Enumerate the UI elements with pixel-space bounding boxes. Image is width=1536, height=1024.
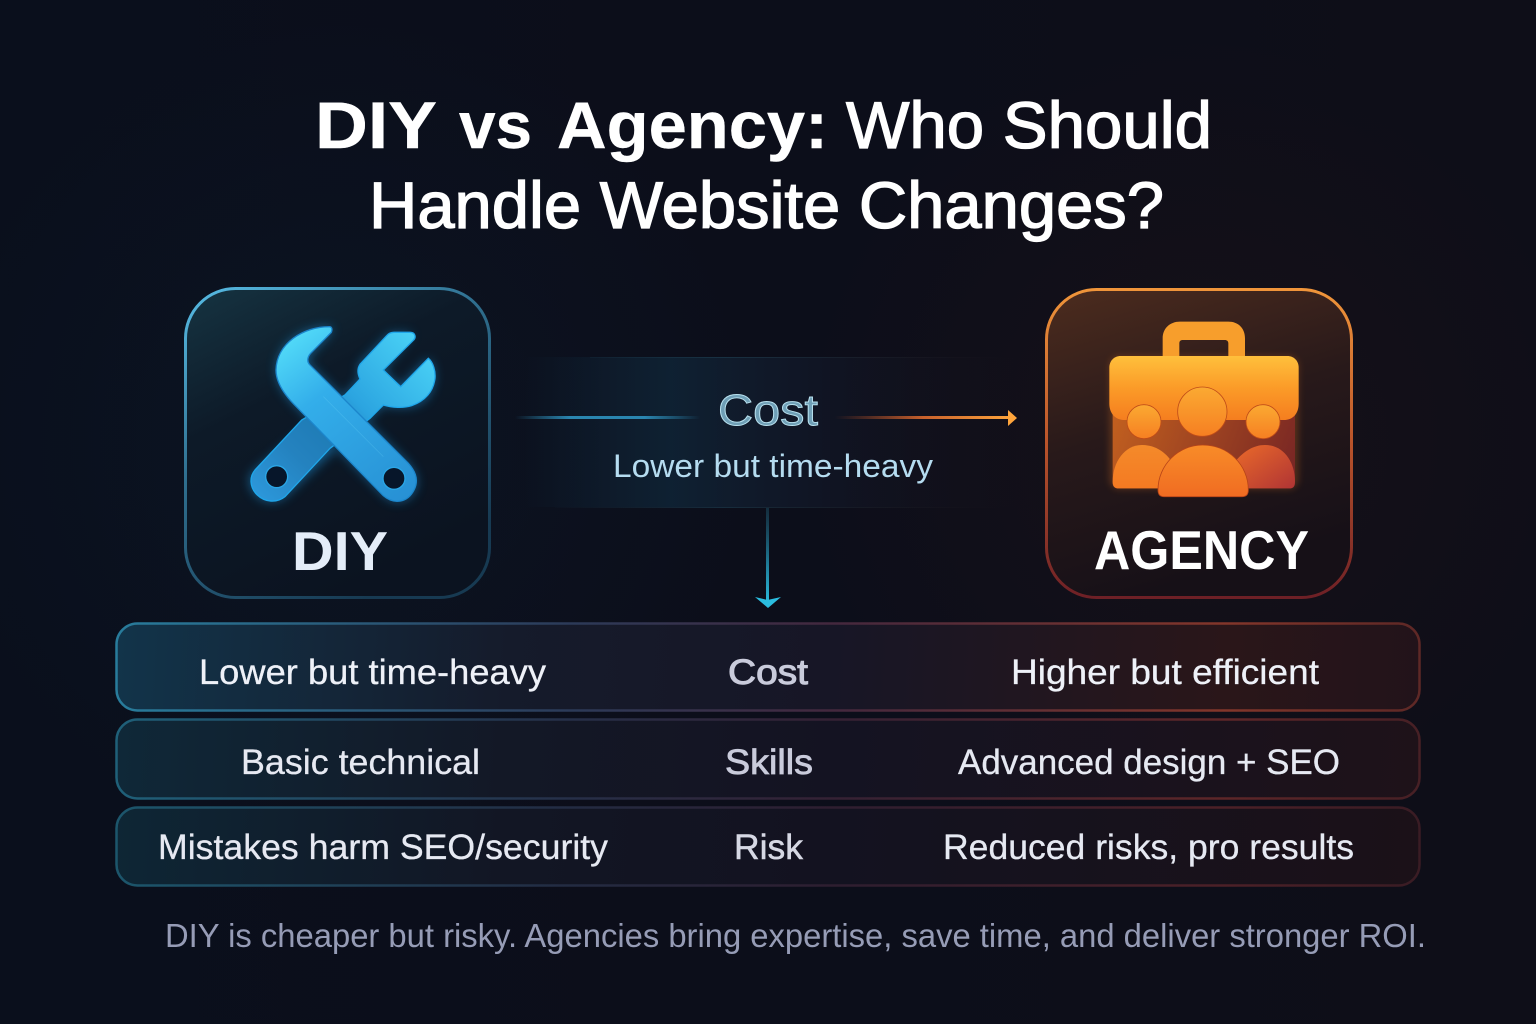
briefcase handle xyxy=(1163,322,1245,358)
comparison row: cost: Lower but time-heavy xyxy=(199,653,547,692)
comparison row: skills: Advanced design + SEO xyxy=(958,743,1340,782)
comparison row: skills: Basic technical xyxy=(241,743,480,782)
front wrench xyxy=(276,327,416,501)
icon: briefcase with team xyxy=(1109,322,1299,497)
title: Handle Website Changes? xyxy=(369,168,1164,242)
briefcase lid xyxy=(1109,356,1299,420)
cost heading: Cost xyxy=(718,386,818,435)
title: vs xyxy=(459,88,532,162)
DIY label: DIY xyxy=(292,520,388,582)
comparison row: risk xyxy=(116,808,1420,886)
agency label: AGENCY xyxy=(1094,519,1309,581)
arrow: down to table xyxy=(755,508,781,608)
panel: cost comparison center xyxy=(515,357,1017,508)
front wrench hole xyxy=(383,467,405,489)
panel: DIY xyxy=(186,288,490,598)
back wrench xyxy=(251,332,435,501)
cost description: Lower but time-heavy xyxy=(613,448,933,484)
comparison row: risk: Mistakes harm SEO/security xyxy=(158,828,609,867)
comparison row: cost: Cost xyxy=(728,653,808,692)
back wrench hole xyxy=(266,466,288,488)
title: Who Should xyxy=(846,88,1212,162)
title xyxy=(315,88,1212,242)
arrow: toward agency xyxy=(835,410,1017,426)
panel: agency xyxy=(1046,290,1352,598)
briefcase body xyxy=(1113,408,1295,488)
title: DIY xyxy=(315,88,437,162)
icon: crossed wrenches xyxy=(250,327,435,501)
comparison row: skills xyxy=(116,720,1420,798)
comparison row: cost: Higher but efficient xyxy=(1011,653,1319,692)
title: Agency: xyxy=(557,88,828,162)
summary text: DIY is cheaper but risky. Agencies bring expertise, save time, and deliver stronger ROI. xyxy=(165,917,1426,954)
arrow: toward DIY xyxy=(515,416,700,419)
comparison row: risk: Reduced risks, pro results xyxy=(943,828,1354,867)
team bodies xyxy=(1113,445,1172,488)
team heads xyxy=(1127,405,1161,439)
comparison row: cost xyxy=(116,624,1420,710)
comparison row: skills: Skills xyxy=(725,743,813,782)
comparison row: risk: Risk xyxy=(734,828,803,867)
